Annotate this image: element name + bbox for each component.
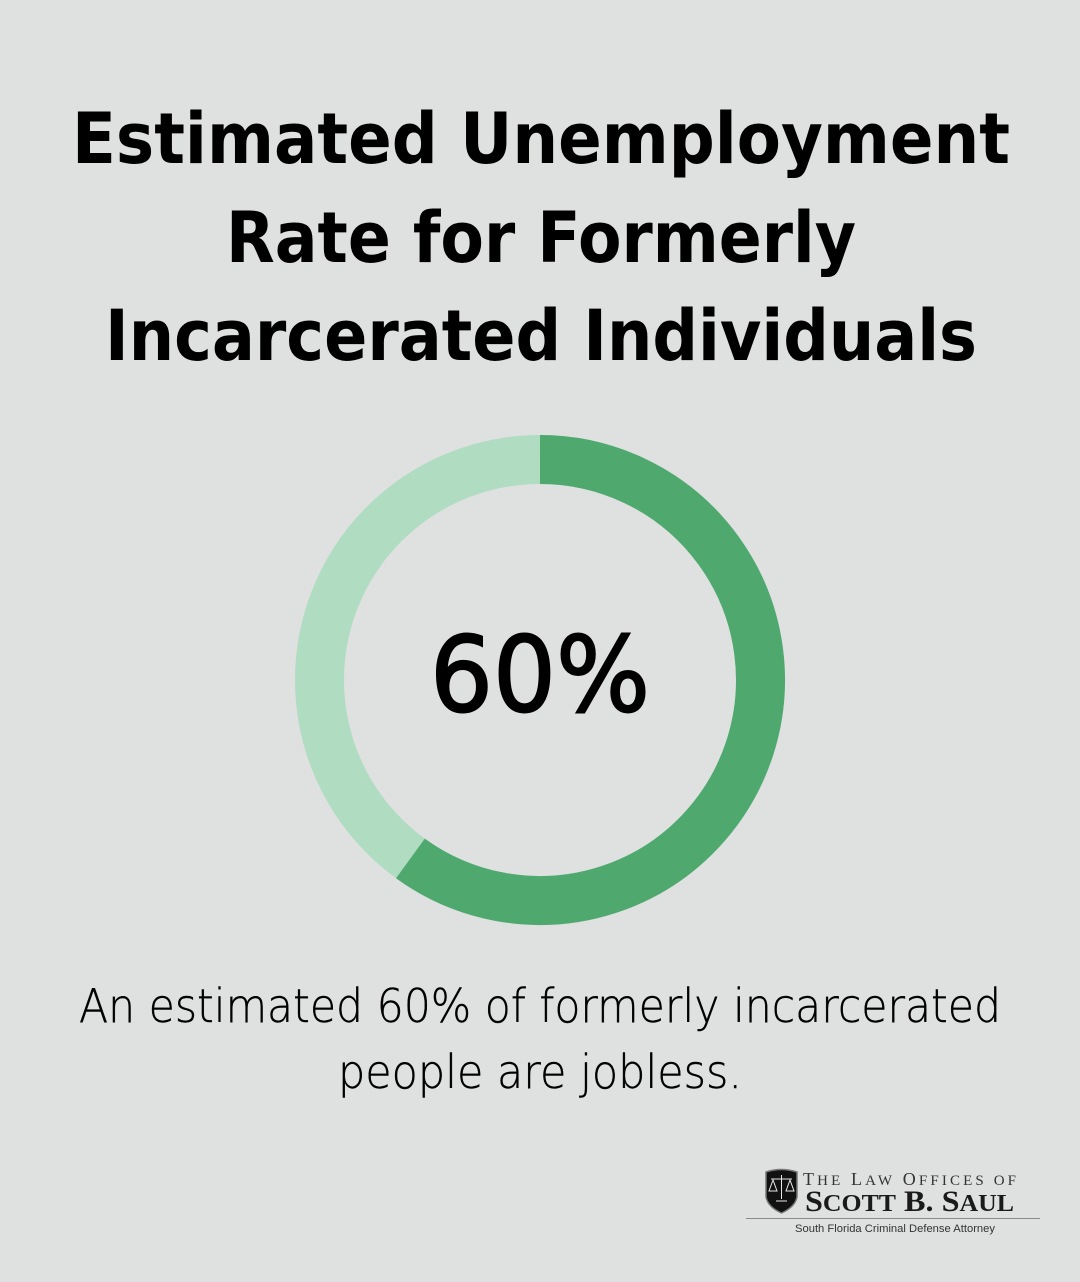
description text: An estimated 60% of formerly incarcerated	[79, 979, 1001, 1033]
title: Rate for Formerly	[226, 197, 856, 279]
title: Incarcerated Individuals	[105, 295, 977, 377]
logo line: the law offices of: THE LAW OFFICES OF	[803, 1169, 1016, 1189]
logo tagline: South Florida Criminal Defense Attorney	[795, 1223, 996, 1235]
title: Estimated Unemployment	[72, 98, 1010, 180]
logo line: Scott B. Saul: SCOTT B. SAUL	[805, 1185, 1014, 1218]
logo divider	[746, 1218, 1040, 1219]
donut remainder segment	[320, 460, 760, 900]
donut 60% segment	[410, 460, 760, 900]
description text	[79, 979, 1001, 1099]
title	[72, 98, 1010, 377]
description text: people are jobless.	[338, 1045, 742, 1099]
donut chart: 60%	[320, 460, 760, 900]
icon: shield with scales	[766, 1170, 797, 1213]
logo: law offices of Scott B. Saul	[746, 1169, 1040, 1235]
center value: 60%	[430, 614, 650, 736]
